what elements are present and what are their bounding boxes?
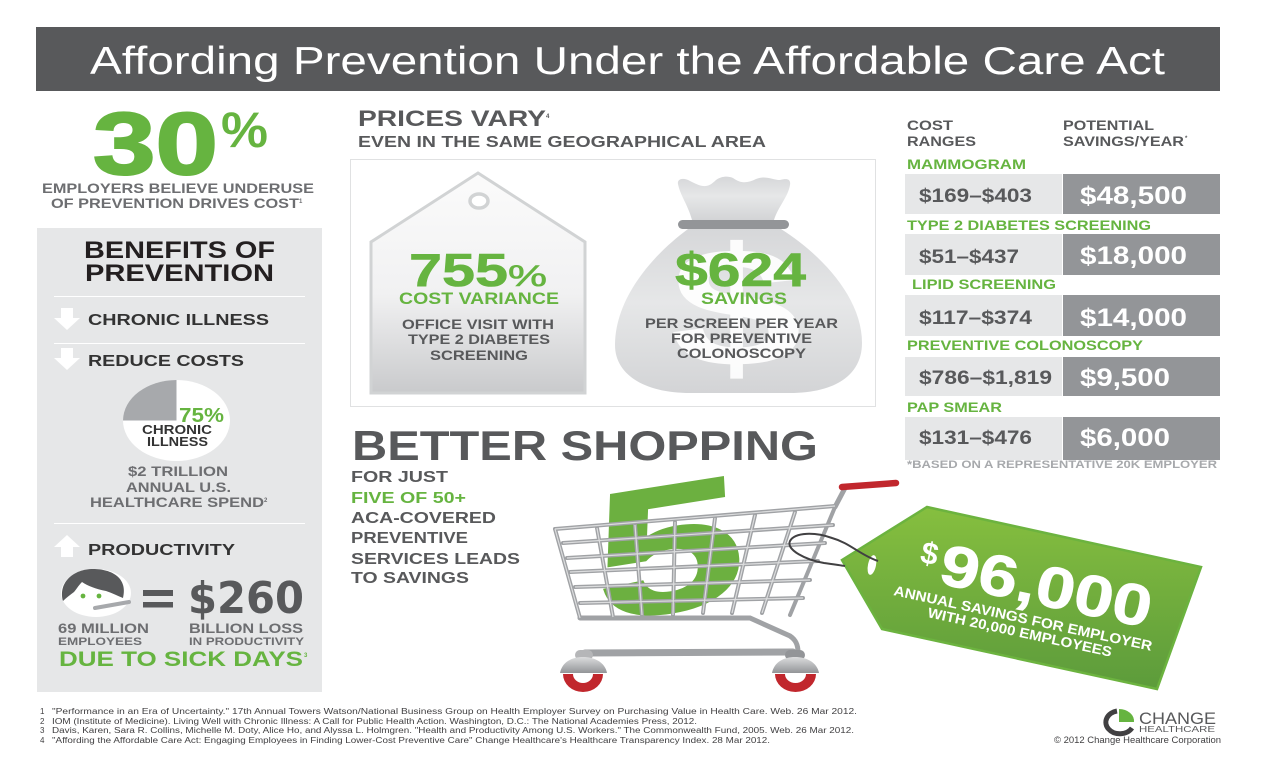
table: cost ranges and potential savings xyxy=(905,118,1220,471)
column header: cost ranges: RANGES xyxy=(907,134,976,149)
row: preventive colonoscopy: PREVENTIVE COLONOSCOPY xyxy=(907,337,1144,353)
footnotes: 3 xyxy=(40,726,45,735)
text: due to sick days: 3 xyxy=(304,653,308,659)
footnotes: 2 xyxy=(40,717,45,726)
title: Affording Prevention Under the Affordable Care Act xyxy=(90,40,1165,83)
row: lipid screening xyxy=(905,276,1220,336)
green price tag: 96,000 annual savings: ANNUAL SAVINGS FOR EMPLOYER xyxy=(892,582,1154,654)
icon: price tag with cost variance: % xyxy=(508,260,547,293)
green price tag: 96,000 annual savings xyxy=(789,507,1201,689)
row: pap smear: $131–$476 xyxy=(919,428,1032,449)
green price tag: 96,000 annual savings: $ xyxy=(918,535,942,572)
text: 69 million employees: EMPLOYEES xyxy=(58,636,142,648)
row: mammogram: $169–$403 xyxy=(919,186,1032,207)
heading: prices vary: PRICES VARY xyxy=(358,106,546,131)
row: preventive colonoscopy xyxy=(905,337,1220,396)
column header: cost ranges xyxy=(907,118,976,149)
heading: prices vary: EVEN IN THE SAME GEOGRAPHICAL AREA xyxy=(358,134,767,151)
footnotes: Davis, Karen, Sara R. Collins, Michelle M. Doty, Alice Ho, and Alyssa L. Holmgren. "Health and Productivity Among U.S. Workers." The Commonwealth Fund, 2005. Web. 26 Mar 2012. xyxy=(52,726,854,735)
row: pap smear: PAP SMEAR xyxy=(907,399,1002,415)
panel: benefits of prevention xyxy=(37,228,322,692)
heading: benefits: PREVENTION xyxy=(85,260,274,287)
icon: down arrow chronic illness xyxy=(54,308,80,330)
icon: money bag with savings: $624 xyxy=(675,243,806,296)
stat: 30 percent: 1 xyxy=(299,199,303,205)
row: preventive colonoscopy: $786–$1,819 xyxy=(919,368,1052,389)
footnotes: 4 xyxy=(40,736,45,745)
footnotes: IOM (Institute of Medicine). Living Well with Chronic Illness: A Call for Public Health Action. Washington, D.C.: The National Academies Press, 2012. xyxy=(52,717,697,726)
text: 2 trillion spend: ANNUAL U.S. xyxy=(126,479,231,495)
icon: money bag with savings: SAVINGS xyxy=(701,289,787,308)
stat: 30 percent: % xyxy=(221,102,268,158)
logo: change healthcare: © 2012 Change Healthcare Corporation xyxy=(1054,735,1221,745)
illustration: shopping cart with number five: 5 xyxy=(590,436,749,660)
row: type 2 diabetes screening: $18,000 xyxy=(1080,242,1187,270)
icon: money bag with savings: $ xyxy=(670,213,802,403)
logo: change healthcare: HEALTHCARE xyxy=(1139,725,1215,734)
column header: potential savings: POTENTIAL xyxy=(1063,118,1154,133)
logo: change healthcare: CHANGE xyxy=(1139,709,1216,728)
table footnote: *BASED ON A REPRESENTATIVE 20K EMPLOYER xyxy=(907,459,1217,471)
column header: cost ranges: COST xyxy=(907,118,954,133)
column header: potential savings: SAVINGS/YEAR xyxy=(1063,134,1184,149)
column header: potential savings xyxy=(1063,118,1188,149)
row: mammogram: MAMMOGRAM xyxy=(907,156,1026,172)
heading: prices vary: 4 xyxy=(546,114,550,120)
pie chart: 75 percent chronic illness: 75% xyxy=(179,405,224,427)
logo: change healthcare xyxy=(1054,709,1221,745)
icon: price tag with cost variance: COST VARIANCE xyxy=(399,289,559,308)
footnotes: 1 xyxy=(40,707,45,716)
illustration: shopping cart with number five xyxy=(555,436,896,692)
row: lipid screening: LIPID SCREENING xyxy=(912,276,1056,292)
label: productivity: PRODUCTIVITY xyxy=(88,542,235,559)
row: pap smear: $6,000 xyxy=(1080,424,1170,452)
icon: price tag with cost variance: SCREENING xyxy=(430,347,528,363)
stat: 30 percent: EMPLOYERS BELIEVE UNDERUSE xyxy=(42,180,314,196)
text: five of 50 services: ACA-COVERED xyxy=(351,510,496,527)
text: billion loss xyxy=(189,620,305,648)
heading: benefits xyxy=(84,237,275,287)
row: preventive colonoscopy: $9,500 xyxy=(1080,364,1170,392)
icon: money bag with savings: PER SCREEN PER YEAR xyxy=(645,315,838,331)
row: type 2 diabetes screening: $51–$437 xyxy=(919,247,1019,268)
icon: price tag with cost variance: 755 xyxy=(409,244,508,296)
text: five of 50 services: SERVICES LEADS xyxy=(351,551,520,568)
row: type 2 diabetes screening: TYPE 2 DIABETES SCREENING xyxy=(907,217,1151,233)
text: due to sick days: DUE TO SICK DAYS xyxy=(59,648,303,671)
row: mammogram xyxy=(905,156,1220,214)
icon: down arrow reduce costs xyxy=(54,348,80,370)
text: billion loss: IN PRODUCTIVITY xyxy=(189,636,305,648)
footnotes xyxy=(40,707,857,745)
text: 2 trillion spend: HEALTHCARE SPEND xyxy=(90,494,264,510)
icon: money bag with savings: FOR PREVENTIVE xyxy=(671,330,812,346)
equals sign xyxy=(143,590,173,608)
heading: benefits: BENEFITS OF xyxy=(84,237,275,264)
text: 69 million employees: 69 MILLION xyxy=(58,620,149,636)
text: 2 trillion spend: 2 xyxy=(264,498,268,504)
footnotes: "Performance in an Era of Uncertainty." 17th Annual Towers Watson/National Business Group on Health Employer Survey on Purchasing Value in Health Care. Web. 26 Mar 2012. xyxy=(52,707,857,716)
panel: prices xyxy=(350,160,876,406)
heading: prices vary xyxy=(358,106,767,151)
icon: up arrow productivity xyxy=(54,535,80,557)
footnotes: "Affording the Affordable Care Act: Engaging Employees in Finding Lower-Cost Preventive Care" Change Healthcare's Healthcare Transparency Index. 28 Mar 2012. xyxy=(52,736,770,745)
pie chart: 75 percent chronic illness: CHRONIC xyxy=(142,423,212,437)
stat: 30 percent: 30 xyxy=(93,94,218,193)
icon: sick face xyxy=(61,569,131,617)
text: five of 50 services: PREVENTIVE xyxy=(351,530,468,547)
stat: 30 percent xyxy=(42,94,314,211)
text: 69 million employees xyxy=(58,620,149,648)
row: type 2 diabetes screening xyxy=(905,217,1220,275)
icon: price tag with cost variance xyxy=(371,173,585,393)
pie chart: 75 percent chronic illness xyxy=(123,380,230,461)
row: pap smear xyxy=(905,399,1220,460)
column header: potential savings: * xyxy=(1185,136,1188,142)
green price tag: 96,000 annual savings: WITH 20,000 EMPLOYEES xyxy=(926,604,1114,660)
text: five of 50 services: FOR JUST xyxy=(351,469,448,486)
row: lipid screening: $117–$374 xyxy=(919,308,1033,329)
row: mammogram: $48,500 xyxy=(1080,182,1187,210)
icon: money bag with savings: COLONOSCOPY xyxy=(677,345,807,361)
label: reduce costs: REDUCE COSTS xyxy=(88,353,244,370)
text: five of 50 services: FIVE OF 50+ xyxy=(351,490,466,507)
row: lipid screening: $14,000 xyxy=(1080,304,1187,332)
title xyxy=(36,27,1220,91)
icon: money bag with savings xyxy=(615,177,862,403)
icon: price tag with cost variance: OFFICE VISIT WITH xyxy=(402,316,554,332)
text: five of 50 services: TO SAVINGS xyxy=(351,570,469,587)
pie chart: 75 percent chronic illness: ILLNESS xyxy=(147,435,208,449)
green price tag: 96,000 annual savings: 96,000 xyxy=(934,532,1158,640)
text: five of 50 services xyxy=(351,469,520,587)
heading: better shopping: BETTER SHOPPING xyxy=(352,422,818,469)
label: chronic illness: CHRONIC ILLNESS xyxy=(88,312,269,329)
text: billion loss: BILLION LOSS xyxy=(189,620,303,636)
stat: 260 dollars: $260 xyxy=(188,573,304,624)
text: 2 trillion spend xyxy=(90,463,268,510)
text: 2 trillion spend: $2 TRILLION xyxy=(128,463,228,479)
stat: 30 percent: OF PREVENTION DRIVES COST xyxy=(51,195,300,211)
icon: price tag with cost variance: TYPE 2 DIABETES xyxy=(408,331,550,347)
